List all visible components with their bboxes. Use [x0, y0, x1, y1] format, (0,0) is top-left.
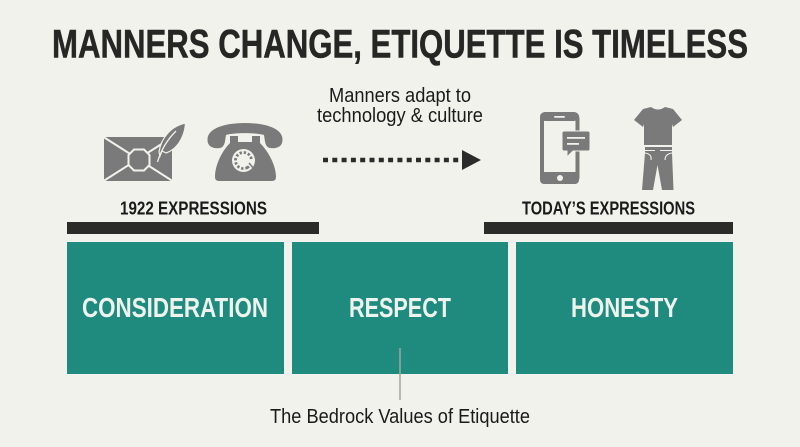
annotation: manners adapt [317, 85, 483, 127]
connector line [399, 348, 401, 400]
panel: respect: RESPECT [349, 292, 451, 323]
bar: today [484, 222, 733, 234]
icon: sealed envelope with quill [104, 123, 186, 181]
label: today's expressions: TODAY’S EXPRESSIONS [522, 198, 695, 218]
arrow: dotted [323, 150, 481, 170]
icon: smartphone with message [540, 112, 590, 184]
annotation: manners adapt: Manners adapt to [329, 85, 471, 107]
panel: honesty [516, 242, 733, 374]
label: 1922 expressions: 1922 EXPRESSIONS [120, 198, 267, 218]
panel: respect [292, 242, 508, 374]
caption: bedrock values: The Bedrock Values of Etiquette [270, 406, 530, 428]
panel: honesty: HONESTY [571, 292, 678, 323]
panel: consideration [67, 242, 284, 374]
icon: t-shirt and trousers [634, 107, 682, 190]
icon: rotary telephone [207, 123, 283, 181]
bar: 1922 [67, 222, 319, 234]
panel: consideration: CONSIDERATION [82, 292, 268, 323]
annotation: manners adapt: technology & culture [317, 105, 483, 127]
